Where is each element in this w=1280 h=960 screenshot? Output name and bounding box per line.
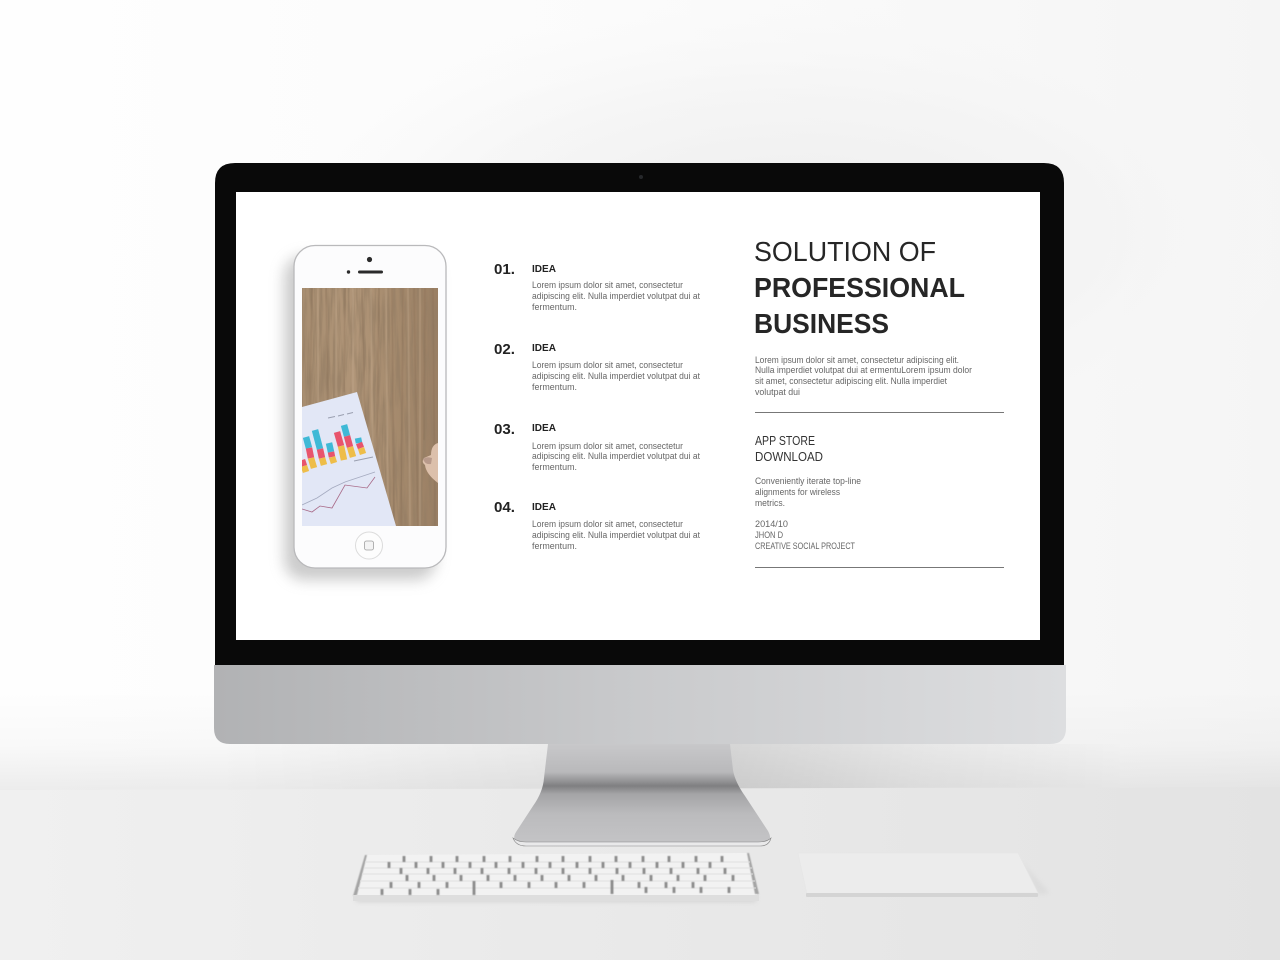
paper with charts	[302, 392, 396, 526]
list item 03: 03.	[494, 421, 515, 438]
app store description: alignments for wireless	[755, 487, 841, 497]
phone home button	[356, 532, 382, 559]
trackpad edge	[806, 893, 1038, 897]
list item 03	[494, 421, 701, 472]
background: wall glow above monitor	[270, 0, 1280, 460]
list item 03: Lorem ipsum dolor sit amet, consectetur	[532, 441, 683, 451]
monitor	[214, 163, 1066, 744]
phone body	[294, 246, 446, 568]
phone	[284, 246, 446, 580]
wood streaks	[310, 288, 404, 472]
line chart	[302, 472, 375, 512]
keyboard key gaps	[382, 856, 733, 895]
list item 02: IDEA	[532, 342, 556, 354]
phone photo	[302, 288, 438, 526]
hand	[423, 443, 438, 483]
project details: JHON D	[755, 530, 783, 540]
list item 01: Lorem ipsum dolor sit amet, consectetur	[532, 280, 683, 290]
list item 04: adipiscing elit. Nulla imperdiet volutpat dui at	[532, 530, 701, 540]
title: PROFESSIONAL	[754, 272, 965, 303]
app store heading: DOWNLOAD	[755, 450, 823, 464]
list item 02: fermentum.	[532, 382, 577, 392]
monitor screen	[236, 192, 1040, 640]
list item 01: 01.	[494, 261, 515, 278]
keyboard rows	[358, 862, 756, 888]
bar chart	[302, 425, 363, 472]
list item 02	[494, 341, 701, 392]
list item 04	[494, 499, 701, 551]
trackpad shadow	[1022, 862, 1050, 895]
list item 02: adipiscing elit. Nulla imperdiet volutpat dui at	[532, 371, 701, 381]
list item 03: adipiscing elit. Nulla imperdiet volutpat dui at	[532, 451, 701, 461]
background: wall lower shading	[0, 690, 1280, 790]
wood grain	[302, 288, 414, 526]
list item 03: IDEA	[532, 422, 556, 434]
list item 04: Lorem ipsum dolor sit amet, consectetur	[532, 519, 683, 529]
description paragraph: Lorem ipsum dolor sit amet, consectetur adipiscing elit.	[755, 355, 959, 365]
list item 04: fermentum.	[532, 541, 577, 551]
background: shadow left of stand	[214, 744, 548, 790]
description paragraph	[755, 355, 972, 397]
chart legend	[328, 412, 373, 461]
monitor camera	[639, 175, 643, 179]
phone shadow	[284, 256, 436, 580]
list item 01	[494, 261, 701, 312]
keyboard shadow	[356, 896, 756, 902]
list item 02: 02.	[494, 341, 515, 358]
app store description	[755, 476, 861, 508]
monitor stand	[513, 744, 771, 846]
list item 04: IDEA	[532, 501, 556, 513]
background: desk	[0, 787, 1280, 960]
monitor chin	[214, 665, 1066, 744]
app store heading: APP STORE	[755, 434, 815, 448]
title: SOLUTION OF	[754, 236, 936, 267]
list item 01: IDEA	[532, 263, 556, 275]
phone speaker and camera	[347, 257, 383, 274]
list item 01: adipiscing elit. Nulla imperdiet volutpat dui at	[532, 291, 701, 301]
app store description: metrics.	[755, 498, 785, 508]
keyboard body	[353, 853, 757, 901]
trackpad surface	[798, 853, 1038, 894]
title: BUSINESS	[754, 308, 889, 339]
list item 02: Lorem ipsum dolor sit amet, consectetur	[532, 360, 683, 370]
project details: 2014/10	[755, 519, 788, 529]
trackpad	[798, 853, 1050, 897]
project details	[755, 519, 856, 551]
background: shadow right of stand	[728, 744, 1128, 790]
keyboard	[353, 853, 759, 902]
monitor bezel	[215, 163, 1064, 665]
list item 01: fermentum.	[532, 302, 577, 312]
list item 04: 04.	[494, 499, 515, 516]
project details: CREATIVE SOCIAL PROJECT	[755, 541, 856, 551]
description paragraph: sit amet, consectetur adipiscing elit. Nulla imperdiet	[755, 376, 948, 386]
app store description: Conveniently iterate top-line	[755, 476, 861, 486]
description paragraph: volutpat dui	[755, 387, 800, 397]
title	[754, 236, 965, 339]
description paragraph: Nulla imperdiet volutpat dui at ermentuLorem ipsum dolor	[755, 365, 972, 375]
list item 03: fermentum.	[532, 462, 577, 472]
app store heading	[755, 434, 823, 464]
